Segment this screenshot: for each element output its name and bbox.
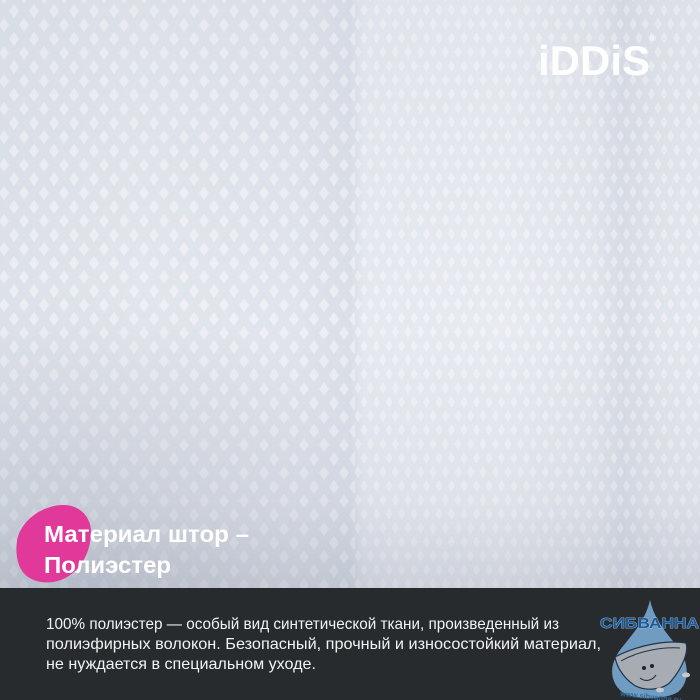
- watermark name: СИБВАННА: [600, 615, 699, 632]
- icon: bathtub mascot: [615, 642, 690, 692]
- description text: не нуждается в специальном уходе.: [46, 656, 316, 673]
- icon: water drop: [612, 600, 687, 698]
- brand logo: IDDIS: ®: [650, 34, 656, 43]
- brand logo: IDDIS: iDDiS: [538, 37, 650, 84]
- pink accent blob: [16, 505, 91, 582]
- description text: полиэфирных волокон. Безопасный, прочный и износостойкий материал,: [46, 636, 601, 653]
- dark description panel: [0, 588, 700, 700]
- heading: curtain material: Материал штор –: [44, 521, 249, 547]
- heading: curtain material: [44, 521, 249, 578]
- description text: 100% полиэстер — особый вид синтетической ткани, произведенный из: [46, 616, 559, 633]
- description text: [46, 616, 601, 673]
- watermark: Sibvanna drop and bathtub mascot: [600, 600, 699, 700]
- heading: curtain material: Полиэстер: [44, 552, 171, 578]
